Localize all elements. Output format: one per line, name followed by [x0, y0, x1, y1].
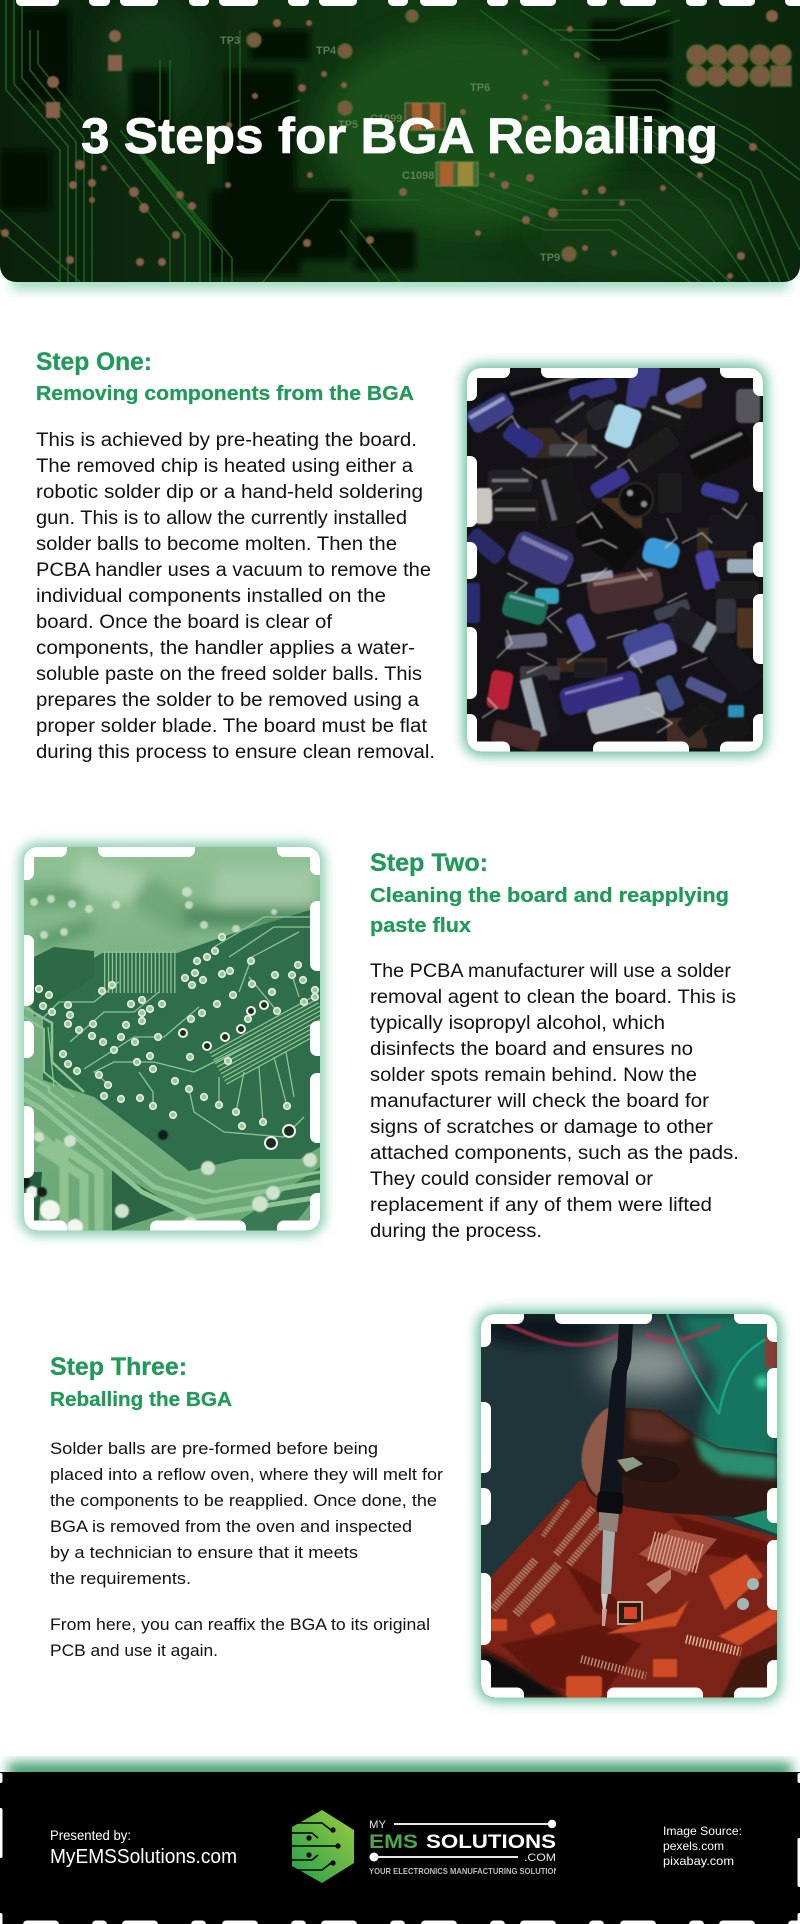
header circuit board photo: TP4 — [316, 45, 337, 57]
step two body text: They could consider removal or — [370, 1169, 654, 1190]
presented by: MyEMSSolutions.com — [50, 1846, 237, 1868]
presented by: Presented by: — [50, 1828, 131, 1843]
step three body text: PCB and use it again. — [50, 1642, 218, 1660]
step one body text: during this process to ensure clean removal. — [36, 742, 435, 763]
step two heading: Step Two: — [370, 849, 488, 877]
logo: My EMS Solutions — [292, 1810, 559, 1883]
header circuit board photo: TP6 — [470, 82, 490, 94]
step one body text: gun. This is to allow the currently installed — [36, 508, 407, 529]
logo wordmark: MY — [369, 1819, 387, 1831]
step one body text: PCBA handler uses a vacuum to remove the — [36, 560, 431, 581]
logo wordmark — [369, 1819, 559, 1876]
step one body text: solder balls to become molten. Then the — [36, 534, 397, 555]
logo wordmark: YOUR ELECTRONICS MANUFACTURING SOLUTION — [369, 1866, 559, 1876]
step one body text: soluble paste on the freed solder balls. This — [36, 664, 422, 685]
step two body text: replacement if any of them were lifted — [370, 1195, 712, 1216]
step two body text: removal agent to clean the board. This is — [370, 987, 736, 1008]
step one body text — [36, 430, 435, 763]
step two body text: The PCBA manufacturer will use a solder — [370, 961, 732, 982]
header circuit board photo — [0, 0, 800, 310]
image sources: pexels.com — [663, 1839, 724, 1853]
step three text — [50, 1353, 444, 1660]
header glow — [12, 268, 788, 290]
step two body text: signs of scratches or damage to other — [370, 1117, 714, 1138]
presented by — [50, 1828, 237, 1868]
icon: hexagon circuit — [292, 1810, 354, 1883]
step one subheading: Removing components from the BGA — [36, 383, 414, 405]
photo notch frame — [16, 839, 328, 1239]
step two body text — [370, 961, 739, 1242]
step one body text: individual components installed on the — [36, 586, 386, 607]
header circuit board photo: TP3 — [220, 35, 240, 47]
step three body text: by a technician to ensure that it meets — [50, 1544, 358, 1562]
step one heading: Step One: — [36, 348, 152, 376]
step two subheading: paste flux — [370, 915, 471, 937]
footer — [0, 1762, 800, 1924]
step two body text: disinfects the board and ensures no — [370, 1039, 693, 1060]
step three body text: Solder balls are pre-formed before being — [50, 1440, 378, 1458]
step two body text: manufacturer will check the board for — [370, 1091, 710, 1112]
step one body text: robotic solder dip or a hand-held soldering — [36, 482, 423, 503]
step two subheading: Cleaning the board and reapplying — [370, 885, 729, 907]
step three subheading: Reballing the BGA — [50, 1389, 232, 1411]
header circuit board photo: TP9 — [540, 252, 560, 264]
step three heading: Step Three: — [50, 1353, 187, 1381]
step three body text — [50, 1440, 444, 1660]
top edge notches — [16, 0, 800, 6]
photo notch frame — [473, 1306, 785, 1706]
logo wordmark: SOLUTIONS — [426, 1832, 556, 1853]
footer edge notches — [0, 1773, 800, 1924]
image sources — [663, 1824, 742, 1868]
step three body text: BGA is removed from the oven and inspected — [50, 1518, 412, 1536]
step three body text: the requirements. — [50, 1570, 191, 1588]
header circuit board photo: C1099 — [370, 113, 402, 125]
step three body text: placed into a reflow oven, where they will melt for — [50, 1466, 444, 1484]
step one body text: This is achieved by pre-heating the board. — [36, 430, 417, 451]
step two body text: typically isopropyl alcohol, which — [370, 1013, 665, 1034]
header circuit board photo: C1098 — [402, 170, 434, 182]
header banner — [0, 0, 800, 310]
step two subheading — [370, 885, 729, 937]
photo notch frame — [459, 360, 771, 760]
photo: soldering iron on red board — [473, 1306, 785, 1706]
photo: capacitors — [459, 360, 771, 760]
step three body text: From here, you can reaffix the BGA to its original — [50, 1616, 430, 1634]
step two body text: during the process. — [370, 1221, 542, 1242]
logo wordmark: .COM — [524, 1852, 556, 1864]
image sources: pixabay.com — [663, 1854, 734, 1868]
step one body text: components, the handler applies a water- — [36, 638, 415, 659]
step one text — [36, 348, 435, 763]
photo: green circuit board — [16, 839, 328, 1239]
step one body text: board. Once the board is clear of — [36, 612, 333, 633]
title: 3 Steps for BGA Reballing — [81, 108, 718, 164]
footer glow — [8, 1762, 792, 1782]
step one body text: proper solder blade. The board must be flat — [36, 716, 428, 737]
step one body text: The removed chip is heated using either a — [36, 456, 413, 477]
logo wordmark: EMS — [369, 1832, 418, 1853]
step two body text: solder spots remain behind. Now the — [370, 1065, 697, 1086]
step one body text: prepares the solder to be removed using a — [36, 690, 419, 711]
step three body text: the components to be reapplied. Once done, the — [50, 1492, 437, 1510]
header circuit board photo: TP5 — [338, 119, 358, 131]
step two body text: attached components, such as the pads. — [370, 1143, 739, 1164]
image sources: Image Source: — [663, 1824, 742, 1838]
step two text — [370, 849, 739, 1242]
